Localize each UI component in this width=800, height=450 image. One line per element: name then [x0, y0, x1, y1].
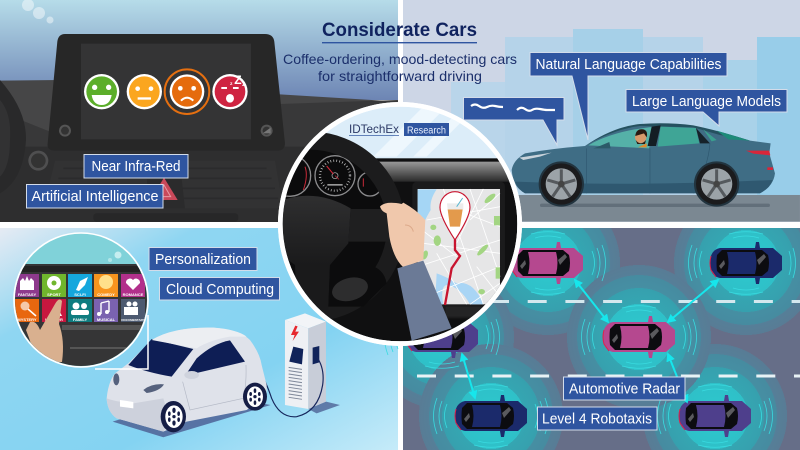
magnified touchscreen bubble: FAMILY [73, 317, 87, 322]
magnified touchscreen bubble: SCI-FI [74, 292, 86, 297]
icon: sleepy face [212, 73, 248, 109]
driver hand and sleeve [380, 203, 452, 341]
label: Artificial Intelligence: Artificial Intelligence [32, 189, 158, 205]
magnified touchscreen bubble: SPORT [47, 292, 61, 297]
magnified touchscreen bubble: FANTASY [18, 292, 37, 297]
label: Near Infra-Red [84, 154, 188, 178]
icon: hazard triangle [160, 178, 178, 200]
purple car left [384, 306, 500, 368]
label: Cloud Computing [160, 278, 280, 300]
subtitle: for straightforward driving [318, 68, 482, 84]
sedan with driver [512, 123, 775, 207]
icon: sleepy face: Z [234, 73, 242, 87]
panel: conversational car [403, 0, 800, 222]
navigation screen [412, 182, 506, 318]
label: Level 4 Robotaxis: Level 4 Robotaxis [542, 412, 652, 428]
steering wheel [282, 133, 402, 319]
callout: Natural Language Capabilities [530, 52, 727, 140]
label: Level 4 Robotaxis [538, 407, 657, 430]
icon: start button [28, 151, 48, 171]
panel: dashboard with mood detection [0, 0, 398, 223]
magnified touchscreen bubble: MYSTERY [17, 317, 37, 322]
logo: IDTechEx Research: IDTechEx [349, 122, 399, 136]
purple car bottom right [658, 385, 772, 447]
icon: neutral face [127, 74, 162, 109]
label: Near Infra-Red: Near Infra-Red [92, 159, 180, 175]
navy car bottom [434, 385, 548, 447]
callout: Large Language Models [626, 90, 787, 126]
label: Personalization [149, 248, 257, 270]
label: Cloud Computing: Cloud Computing [166, 282, 274, 298]
label: Automotive Radar [564, 377, 685, 400]
callout: Large Language Models: Large Language Models [632, 94, 781, 110]
road [403, 195, 800, 222]
icon: sad face with highlight ring [165, 69, 209, 114]
navy car top right [688, 232, 796, 294]
pink car top [490, 232, 606, 294]
electric car [107, 328, 267, 432]
subtitle: Coffee-ordering, mood-detecting cars [283, 51, 517, 67]
panel: personalization and EV charging [0, 228, 398, 450]
icon: sleepy face: z [242, 81, 246, 88]
central circle: navigation to coffee [278, 102, 522, 346]
magnified touchscreen bubble: COMEDY [97, 292, 115, 297]
panel: robotaxis with automotive radar [384, 228, 800, 450]
pink car centre [582, 306, 696, 368]
speech bubble: wavy lines [464, 98, 564, 145]
magnified touchscreen bubble: HORROR [45, 317, 63, 322]
label: Personalization: Personalization [155, 252, 251, 268]
subtitle [283, 51, 517, 84]
radar link arrows [462, 280, 718, 402]
magnified touchscreen bubble: ROMANCE [123, 292, 144, 297]
label: Automotive Radar: Automotive Radar [569, 382, 680, 398]
charging station [257, 313, 340, 417]
icon: sleepy face: z [230, 81, 233, 87]
infotainment screen [48, 34, 285, 151]
magnified touchscreen bubble: DOCUMENTARY [121, 318, 145, 322]
label: Artificial Intelligence [26, 184, 163, 208]
logo: IDTechEx Research: Research [407, 126, 446, 136]
radar fields [403, 228, 800, 450]
car shadow [113, 398, 271, 437]
magnified touchscreen bubble [14, 233, 148, 369]
callout: Natural Language Capabilities: Natural Language Capabilities [536, 57, 722, 73]
magnified touchscreen bubble: MUSICAL [97, 317, 116, 322]
icon: happy face [84, 74, 119, 109]
logo: IDTechEx Research [349, 122, 449, 136]
title: Considerate Cars [322, 20, 477, 41]
gauge cluster [282, 146, 379, 302]
